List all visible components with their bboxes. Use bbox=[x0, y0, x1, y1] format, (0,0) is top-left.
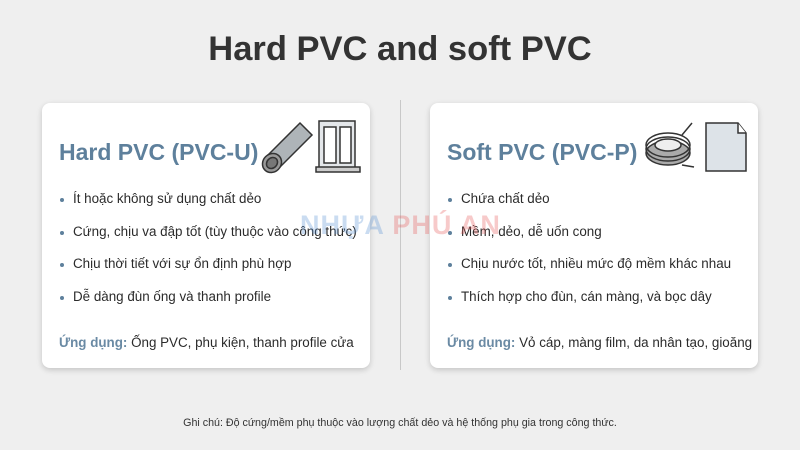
icons: cable coil and film bbox=[645, 122, 747, 172]
panel: soft PVC bbox=[430, 103, 758, 368]
bullet list: Cứng, chịu va đập tốt (tùy thuộc vào công thức) bbox=[73, 224, 357, 238]
bullet list: Dễ dàng đùn ống và thanh profile bbox=[73, 288, 271, 304]
panel: hard PVC bbox=[42, 103, 370, 368]
watermark: NHỰA PHÚ AN bbox=[300, 210, 501, 240]
bullet list: Chịu thời tiết với sự ổn định phù hợp bbox=[73, 256, 291, 271]
application: Ứng dụng: Vỏ cáp, màng film, da nhân tạo, gioăng bbox=[447, 335, 752, 350]
footnote: Ghi chú: Độ cứng/mềm phụ thuộc vào lượng chất dẻo và hệ thống phụ gia trong công thức. bbox=[183, 417, 617, 429]
bullet list: Mềm, dẻo, dễ uốn cong bbox=[461, 224, 602, 238]
icons: pipe and window frame bbox=[262, 120, 361, 174]
bullet list bbox=[60, 191, 357, 304]
heading: soft PVC: Soft PVC (PVC-P) bbox=[447, 139, 637, 165]
bullet list: Chứa chất dẻo bbox=[461, 191, 550, 206]
bullet list bbox=[448, 191, 731, 304]
bullet list: Thích hợp cho đùn, cán màng, và bọc dây bbox=[461, 288, 712, 304]
heading: hard PVC: Hard PVC (PVC-U) bbox=[59, 139, 258, 165]
application: Ứng dụng: Ống PVC, phụ kiện, thanh profile cửa bbox=[59, 335, 354, 350]
bullet list: Ít hoặc không sử dụng chất dẻo bbox=[73, 191, 261, 206]
bullet list: Chịu nước tốt, nhiều mức độ mềm khác nhau bbox=[461, 256, 731, 271]
title: Hard PVC and soft PVC bbox=[208, 30, 592, 68]
